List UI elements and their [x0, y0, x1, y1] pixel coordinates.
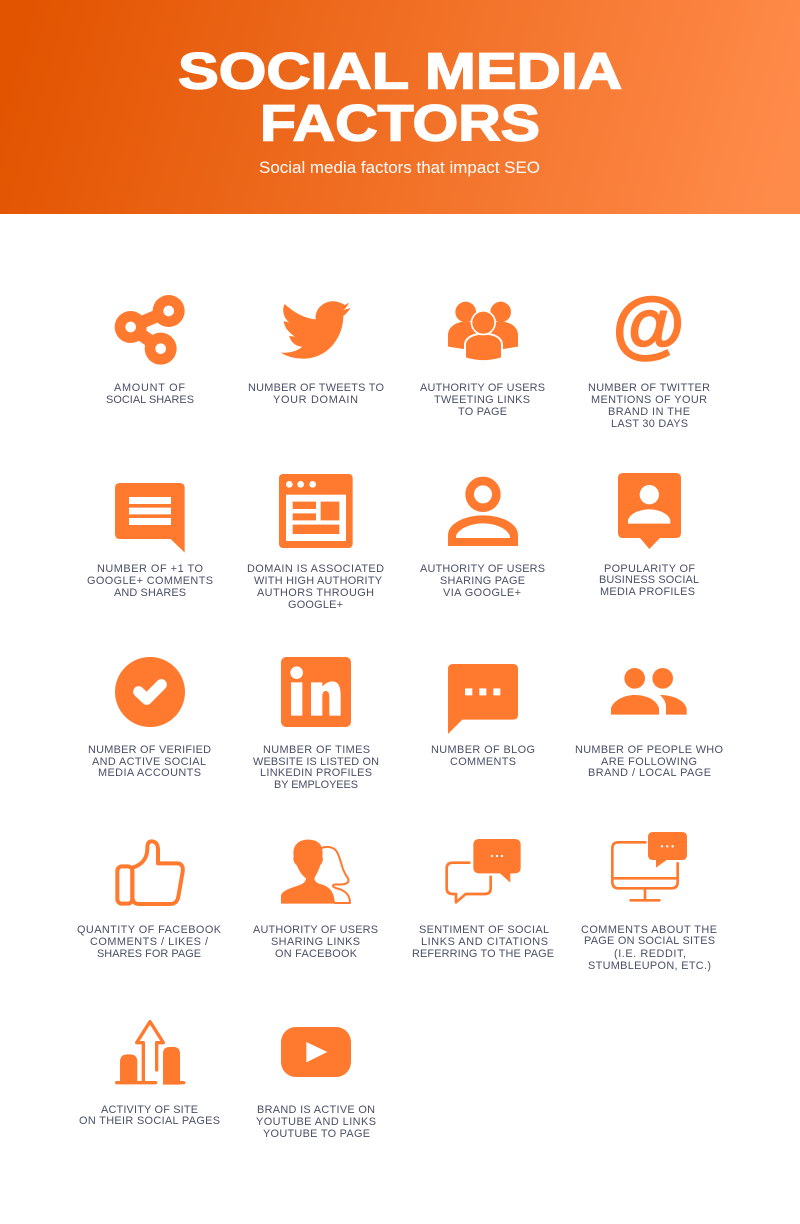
- factor: tweets to domain: [248, 301, 384, 406]
- label: COMMENTS: [450, 756, 516, 768]
- icon: man and woman silhouettes: [281, 840, 350, 904]
- factor: activity on social pages: [79, 1022, 220, 1127]
- label: SHARES FOR PAGE: [97, 948, 201, 960]
- factor: blog comments: [431, 664, 535, 768]
- label: [253, 924, 378, 960]
- factor: business social profiles: [599, 473, 699, 598]
- label: [256, 1104, 376, 1140]
- icon: comment bubble with lines: [115, 483, 185, 553]
- label: [88, 744, 211, 779]
- label: [431, 744, 535, 768]
- label: NUMBER OF PEOPLE WHO: [575, 744, 723, 756]
- label: SHARING LINKS: [271, 936, 360, 948]
- factor: sentiment of social links: [412, 839, 554, 960]
- label: ON FACEBOOK: [275, 948, 358, 960]
- label: [588, 382, 710, 430]
- icon: profile pin: [618, 473, 681, 549]
- title: FACTORS: [260, 94, 540, 152]
- label: STUMBLEUPON, ETC.): [588, 960, 711, 972]
- label: NUMBER OF TIMES: [263, 744, 370, 756]
- factor: authority of users sharing via google+: [420, 481, 545, 599]
- factor: authority of users tweeting: [420, 302, 545, 418]
- factor: people following: [575, 668, 723, 779]
- factor: listed on linkedin: [253, 657, 379, 791]
- label: YOUTUBE TO PAGE: [263, 1128, 370, 1140]
- label: AUTHORITY OF USERS: [420, 563, 545, 575]
- label: AMOUNT OF: [114, 382, 185, 394]
- label: PAGE ON SOCIAL SITES: [584, 935, 715, 947]
- label: ON THEIR SOCIAL PAGES: [79, 1115, 220, 1127]
- label: AND ACTIVE SOCIAL: [92, 756, 206, 768]
- factor: domain associated with authors: [247, 474, 384, 611]
- label: [77, 924, 222, 960]
- factor: twitter mentions: [588, 282, 710, 430]
- icon: two people: [611, 668, 687, 715]
- label: YOUTUBE AND LINKS: [256, 1116, 376, 1128]
- label: [420, 382, 545, 418]
- label: LINKS AND CITATIONS: [421, 936, 548, 948]
- label: AUTHORS THROUGH: [257, 587, 374, 599]
- label: ARE FOLLOWING: [601, 756, 697, 768]
- label: BRAND IS ACTIVE ON: [257, 1104, 375, 1116]
- label: LAST 30 DAYS: [611, 418, 688, 430]
- icon: at sign: @: [612, 282, 685, 365]
- label: AND SHARES: [114, 587, 186, 599]
- label: WITH HIGH AUTHORITY: [254, 575, 383, 587]
- header banner: [0, 0, 800, 214]
- icon: linkedin: [281, 657, 351, 727]
- label: NUMBER OF BLOG: [431, 744, 535, 756]
- label: [599, 563, 699, 598]
- icon: youtube play: [281, 1027, 351, 1077]
- label: [581, 924, 717, 972]
- label: SENTIMENT OF SOCIAL: [419, 924, 549, 936]
- label: POPULARITY OF: [604, 563, 695, 575]
- icon: thumbs up: [117, 841, 183, 904]
- label: GOOGLE+ COMMENTS: [87, 575, 213, 587]
- factor: active on youtube: [256, 1027, 376, 1140]
- label: [248, 382, 384, 406]
- label: TWEETING LINKS: [434, 394, 530, 406]
- label: NUMBER OF TWITTER: [588, 382, 710, 394]
- label: ACTIVITY OF SITE: [101, 1104, 198, 1116]
- label: SHARING PAGE: [440, 575, 525, 587]
- factor: verified accounts: [88, 657, 211, 779]
- icon: check circle: [115, 657, 185, 727]
- icon: bars and up arrow: [117, 1022, 184, 1085]
- factor: comments on social sites: [581, 832, 717, 972]
- label: QUANTITY OF FACEBOOK: [77, 924, 222, 936]
- factor: +1 to google+ comments: [87, 483, 213, 599]
- label: [575, 744, 723, 779]
- label: DOMAIN IS ASSOCIATED: [247, 563, 384, 575]
- factor: facebook comments and likes: [77, 841, 222, 960]
- label: [106, 382, 194, 406]
- label: GOOGLE+: [288, 599, 343, 611]
- label: [253, 744, 379, 791]
- label: AUTHORITY OF USERS: [420, 382, 545, 394]
- icon: monitor with comment: [612, 832, 687, 900]
- label: YOUR DOMAIN: [273, 394, 358, 406]
- label: VIA GOOGLE+: [443, 587, 521, 599]
- label: [247, 563, 384, 611]
- label: BRAND IN THE: [608, 406, 690, 418]
- label: NUMBER OF VERIFIED: [88, 744, 211, 756]
- title: [178, 42, 622, 152]
- label: MEDIA ACCOUNTS: [98, 767, 201, 779]
- label: MEDIA PROFILES: [600, 586, 695, 598]
- label: COMMENTS ABOUT THE: [581, 924, 717, 936]
- label: BRAND / LOCAL PAGE: [588, 767, 711, 779]
- label: BY EMPLOYEES: [274, 779, 358, 791]
- label: AUTHORITY OF USERS: [253, 924, 378, 936]
- label: [420, 563, 545, 599]
- title: SOCIAL MEDIA: [178, 42, 622, 100]
- label: SOCIAL SHARES: [106, 394, 194, 406]
- factor: amount of social shares: [106, 295, 194, 406]
- subtitle: Social media factors that impact SEO: [259, 158, 540, 177]
- label: NUMBER OF TWEETS TO: [248, 382, 384, 394]
- label: NUMBER OF +1 TO: [97, 563, 203, 575]
- icon: chat bubbles: [447, 839, 521, 902]
- label: (I.E. REDDIT,: [614, 948, 686, 960]
- label: REFERRING TO THE PAGE: [412, 948, 554, 960]
- label: WEBSITE IS LISTED ON: [253, 756, 379, 768]
- icon: twitter bird: [281, 301, 351, 359]
- label: LINKEDIN PROFILES: [260, 767, 372, 779]
- icon: user outline: [448, 481, 518, 546]
- label: [79, 1104, 220, 1127]
- factor: authority sharing on facebook: [253, 840, 378, 960]
- label: COMMENTS / LIKES /: [90, 936, 209, 948]
- icon: user group: [448, 302, 518, 360]
- label: [412, 924, 554, 960]
- icon: browser window: [279, 474, 353, 548]
- icon: share nodes: [115, 295, 185, 365]
- label: [87, 563, 213, 599]
- label: MENTIONS OF YOUR: [591, 394, 707, 406]
- label: BUSINESS SOCIAL: [599, 574, 699, 586]
- icon: comment bubble with dots: [448, 664, 518, 734]
- label: TO PAGE: [458, 406, 507, 418]
